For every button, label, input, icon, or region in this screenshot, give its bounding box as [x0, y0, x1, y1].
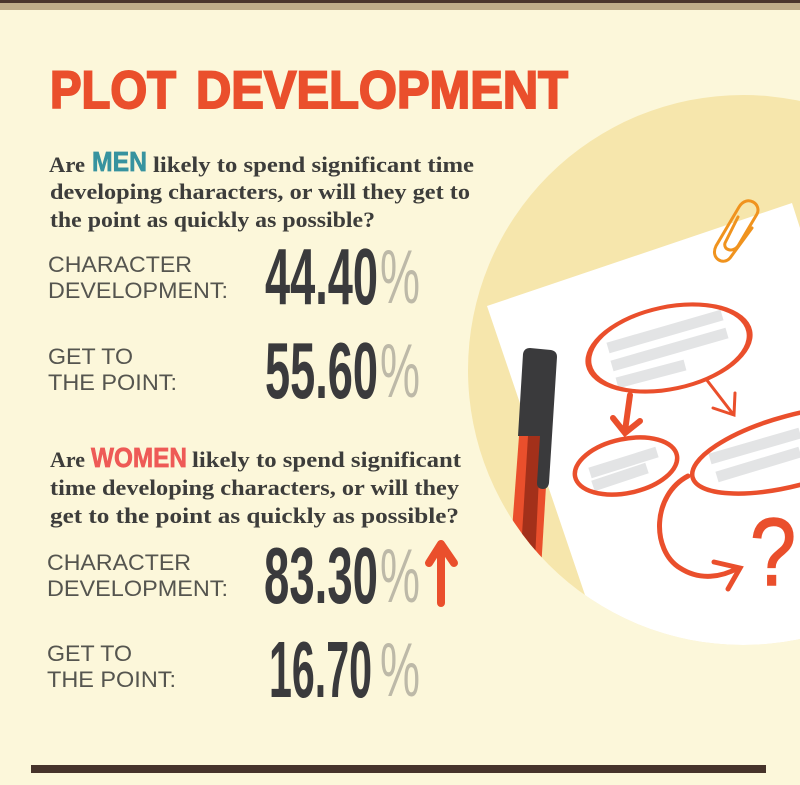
stat: men get to the point: 55.60: [265, 326, 378, 415]
stat: men character development: CHARACTER: [48, 252, 192, 277]
question: women: [50, 442, 462, 528]
title: DEVELOPMENT: [196, 61, 568, 120]
icon: paper clip: [714, 201, 758, 261]
title: PLOT: [50, 61, 176, 120]
question: men: MEN: [92, 146, 147, 177]
question: women: WOMEN: [91, 442, 187, 473]
stat: women get to the point: THE POINT:: [47, 667, 176, 692]
icon: pen: [512, 348, 557, 570]
stat: women get to the point: [47, 625, 420, 714]
stat: men get to the point: GET TO: [48, 344, 133, 369]
arrow: thin down-right: [706, 379, 735, 415]
question: women: likely to spend significant: [192, 447, 462, 472]
stat: men get to the point: [48, 326, 420, 415]
diagram bubble: small left: [570, 429, 682, 503]
top border band: [0, 0, 800, 10]
bottom rule: [31, 765, 766, 773]
stat: women character development: DEVELOPMENT:: [47, 576, 228, 601]
question: women: time developing characters, or will they: [50, 475, 459, 500]
question: women: Are: [50, 447, 85, 472]
stat: men character development: [48, 232, 420, 321]
stat: women character development: [47, 531, 420, 620]
diagram bubble: large right: [684, 389, 800, 511]
question: men: likely to spend significant time: [153, 152, 474, 177]
illustration: notepaper with plot diagram: [468, 95, 800, 660]
stat: women character development: CHARACTER: [47, 550, 191, 575]
arrow: curved: [660, 476, 740, 589]
white paper sheet: [487, 203, 800, 660]
icon: up arrow: [429, 544, 454, 603]
question: men: [49, 146, 474, 232]
diagram bubble: top: [577, 288, 761, 408]
stat: women get to the point: 16.70: [269, 625, 372, 714]
question: women: get to the point as quickly as possible?: [50, 503, 459, 528]
stat: men character development: %: [380, 235, 420, 320]
stat: men character development: 44.40: [265, 232, 378, 321]
stat: men character development: DEVELOPMENT:: [48, 278, 228, 303]
stat: women get to the point: %: [380, 628, 420, 713]
title: [50, 61, 568, 120]
stat: women character development: 83.30: [264, 531, 378, 620]
question: men: developing characters, or will they get to: [50, 179, 470, 204]
stat: women get to the point: GET TO: [47, 641, 132, 666]
stat: men get to the point: %: [380, 329, 420, 414]
question: men: the point as quickly as possible?: [50, 207, 375, 232]
stat: women character development: %: [380, 534, 420, 619]
arrow: thick down-left: [613, 395, 640, 433]
background circle: [468, 95, 800, 645]
stat: men get to the point: THE POINT:: [48, 370, 177, 395]
question: men: Are: [49, 152, 85, 177]
